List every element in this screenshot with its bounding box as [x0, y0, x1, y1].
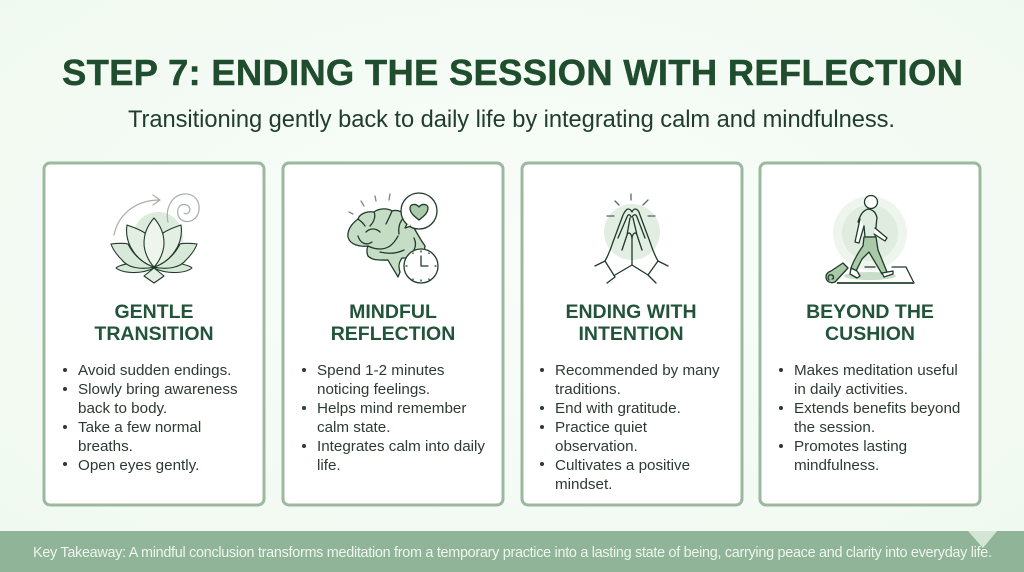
bullet list [779, 362, 960, 474]
icon: lotus with arrow and spiral [111, 194, 199, 283]
bullet list: life. [317, 457, 341, 474]
panel: gentle transition [44, 163, 264, 505]
bullet list: Take a few normal [78, 419, 201, 436]
footer banner: key takeaway: Key Takeaway: A mindful conclusion transforms meditation from a temporary practice into a lasting state of being, carrying peace and clarity into everyday life. [33, 545, 992, 561]
icon: person walking on mat [826, 196, 914, 283]
bullet list: Avoid sudden endings. [78, 362, 231, 379]
bullet list: Makes meditation useful [794, 362, 958, 379]
icon: praying hands [595, 194, 668, 283]
panel: ending with intention [522, 163, 742, 505]
bullet list: in daily activities. [794, 381, 908, 398]
footer banner: key takeaway [0, 531, 1024, 572]
bullet list: Open eyes gently. [78, 457, 199, 474]
bullet list: Practice quiet [555, 419, 648, 436]
bullet list: Slowly bring awareness [78, 381, 238, 398]
bullet list: Integrates calm into daily [317, 438, 485, 455]
bullet list: back to body. [78, 400, 167, 417]
bullet list [540, 362, 720, 493]
heading: GENTLE [114, 301, 194, 323]
bullet list: Spend 1-2 minutes [317, 362, 445, 379]
bullet list: Helps mind remember [317, 400, 466, 417]
panel: beyond the cushion: CUSHION [825, 323, 915, 345]
bullet list: Extends benefits beyond [794, 400, 960, 417]
panel: beyond the cushion [760, 163, 980, 505]
bullet list: mindset. [555, 476, 612, 493]
panel: mindful reflection [283, 163, 503, 505]
heading: ENDING WITH [565, 301, 697, 323]
panel: ending with intention: INTENTION [578, 323, 684, 345]
bullet list: breaths. [78, 438, 133, 455]
bullet list: observation. [555, 438, 638, 455]
bullet list: Promotes lasting [794, 438, 907, 455]
bullet list: Recommended by many [555, 362, 720, 379]
panel: mindful reflection: REFLECTION [331, 323, 455, 345]
bullet list: calm state. [317, 419, 390, 436]
bullet list [302, 362, 485, 474]
bullet list: noticing feelings. [317, 381, 430, 398]
subtitle: Transitioning gently back to daily life by integrating calm and mindfulness. [128, 107, 895, 133]
heading: BEYOND THE [806, 301, 934, 323]
bullet list: Cultivates a positive [555, 457, 690, 474]
icon: brain with heart bubble and clock [348, 193, 438, 283]
bullet list: End with gratitude. [555, 400, 681, 417]
bullet list: traditions. [555, 381, 621, 398]
heading: MINDFUL [349, 301, 437, 323]
bullet list: the session. [794, 419, 875, 436]
title: STEP 7: ENDING THE SESSION WITH REFLECTION [62, 52, 963, 93]
panel: gentle transition: TRANSITION [94, 323, 214, 345]
bullet list: mindfulness. [794, 457, 879, 474]
bullet list [63, 362, 238, 474]
